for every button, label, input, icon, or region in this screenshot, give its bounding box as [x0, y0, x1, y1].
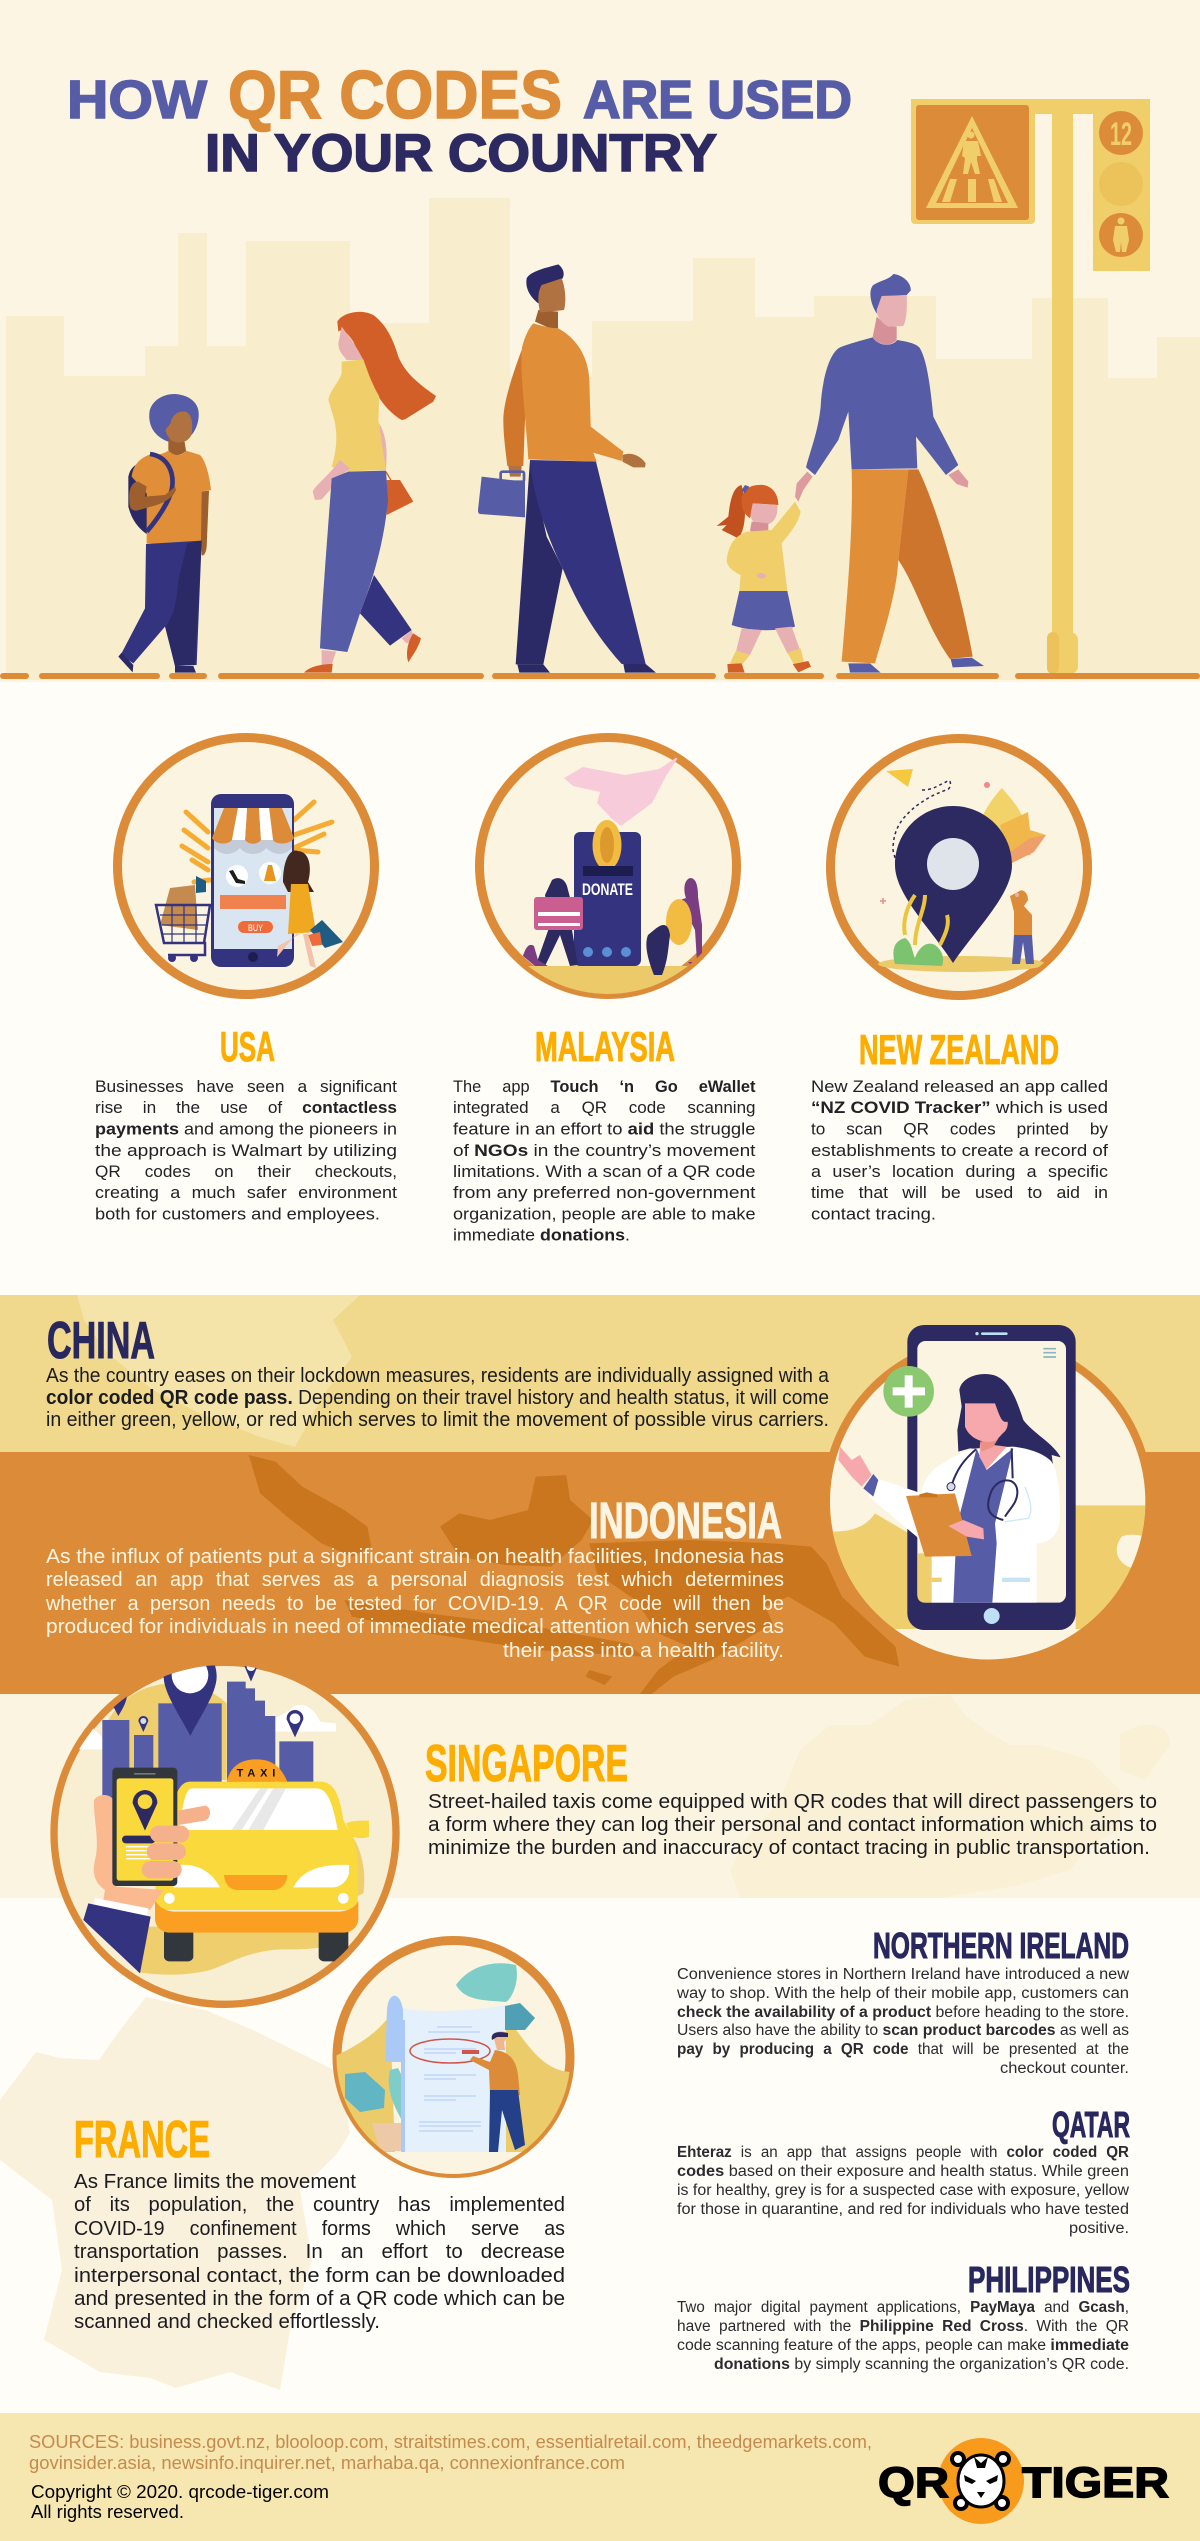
road dashes: [0, 673, 1200, 679]
hand holding phone: [83, 1768, 210, 1973]
panel: Singapore band: [0, 1694, 1200, 1898]
text: France body: and presented in the form of a QR code which can be: [74, 2288, 565, 2310]
text: Indonesia body: produced for individuals in need of immediate medical attention which serves as: [46, 1616, 784, 1638]
traffic sign post: 12: [1110, 116, 1132, 152]
Indonesia map silhouette: [249, 1455, 899, 1695]
China map silhouette: [77, 1295, 360, 1447]
person: man with briefcase: [478, 264, 656, 673]
text: New Zealand body: a user’s location during a specific: [811, 1162, 1109, 1181]
text: Qatar body: codes based on their exposure and health status. While green: [677, 2163, 1129, 2180]
panel: Indonesia text: [45, 1492, 784, 1662]
panel: Indonesia band: [0, 1452, 1200, 1695]
text: Indonesia body: whether a person needs to be tested for COVID-19. A QR code will then be: [45, 1593, 784, 1615]
paper form: [385, 1996, 506, 2152]
text: Malaysia body: organization, people are able to make: [453, 1204, 756, 1224]
text: Malaysia body: from any preferred non-government: [453, 1183, 756, 1202]
father: [795, 274, 984, 673]
text: USA body: [95, 1077, 397, 1224]
text: Indonesia body: their pass into a health facility.: [503, 1640, 784, 1662]
text: Malaysia body: The app Touch ‘n Go eWallet: [453, 1077, 756, 1096]
heading: New Zealand: NEW ZEALAND: [859, 1026, 1059, 1073]
person: boy and woman: [118, 312, 436, 673]
text: copyright: All rights reserved.: [31, 2501, 184, 2522]
text: France body: [74, 2171, 565, 2333]
panel: China text: [46, 1312, 830, 1431]
text: Northern Ireland body: Convenience stores in Northern Ireland have introduced a new: [677, 1966, 1130, 1983]
text: Malaysia body: of NGOs in the country’s movement: [453, 1141, 756, 1160]
text: USA body: payments and among the pioneers in: [95, 1120, 397, 1138]
text: France body: As France limits the movement: [74, 2171, 356, 2193]
text: China body: in either green, yellow, or red which serves to limit the movement of possible virus carriers.: [46, 1409, 829, 1431]
logo: QR Tiger: QR: [878, 2459, 949, 2507]
text: France body: scanned and checked effortlessly.: [74, 2311, 380, 2333]
text: Northern Ireland body: way to shop. With the help of their mobile app, customers can: [676, 1985, 1129, 2002]
text: Northern Ireland body: check the availability of a product before heading to the store.: [677, 2004, 1129, 2021]
heading: USA: USA: [220, 1023, 275, 1070]
text: Malaysia body: limitations. With a scan of a QR code: [453, 1162, 756, 1181]
text: Philippines body: donations by simply scanning the organization’s QR code.: [714, 2356, 1129, 2373]
taxi car: [155, 1759, 369, 1961]
title: ARE USED: [583, 70, 852, 130]
text: New Zealand body: time that will be used to aid in: [811, 1183, 1108, 1202]
icon: online store phone circle: BUY: [248, 923, 263, 933]
panel: France text: [74, 2111, 565, 2333]
heading: Philippines: PHILIPPINES: [968, 2259, 1130, 2300]
text: USA body: the approach is Walmart by utilizing: [95, 1141, 397, 1160]
panel: China band: [0, 1295, 1200, 1452]
text: Singapore body: Street-hailed taxis come equipped with QR codes that will direct passengers to: [428, 1791, 1157, 1813]
heading: Indonesia: INDONESIA: [589, 1492, 782, 1549]
text: Qatar body: Ehteraz is an app that assigns people with color coded QR: [677, 2144, 1129, 2161]
text: Northern Ireland body: [676, 1966, 1130, 2077]
text: Indonesia body: [45, 1546, 784, 1662]
text: France body: interpersonal contact, the form can be downloaded: [74, 2265, 565, 2287]
panel: France map: [0, 1997, 350, 2390]
text: Philippines body: [677, 2299, 1129, 2373]
text: New Zealand body: contact tracing.: [811, 1204, 936, 1224]
panel: New Zealand: [811, 738, 1109, 1224]
traffic sign post: [911, 99, 1150, 675]
icon: doctor on phone circle: [826, 1325, 1149, 1663]
Singapore map silhouette: [730, 1694, 1170, 1898]
text: Singapore body: a form where they can log their personal and contact information which aims to: [428, 1814, 1157, 1836]
text: USA body: QR codes on their checkouts,: [95, 1162, 397, 1181]
text: Northern Ireland body: Users also have the ability to scan product barcodes as well as: [677, 2022, 1129, 2039]
text: Qatar body: is for healthy, grey is for a suspected case with exposure, yellow: [677, 2182, 1130, 2199]
heading: China: CHINA: [47, 1312, 155, 1370]
logo: QR Tiger: TIGER: [1022, 2459, 1169, 2507]
panel: Malaysia: [453, 738, 756, 1244]
text: copyright: [31, 2481, 329, 2522]
text: sources: [29, 2431, 872, 2473]
heading: Malaysia: MALAYSIA: [535, 1023, 675, 1070]
text: New Zealand body: “NZ COVID Tracker” which is used: [811, 1098, 1108, 1117]
girl: [717, 485, 811, 673]
text: sources: govinsider.asia, newsinfo.inquirer.net, marhaba.qa, connexionfrance.com: [29, 2452, 625, 2473]
panel: Northern Ireland: [676, 1925, 1130, 2077]
text: USA body: Businesses have seen a significant: [95, 1077, 397, 1096]
text: copyright: Copyright © 2020. qrcode-tiger.com: [31, 2481, 329, 2502]
icon: donate phone circle: DONATE: [582, 880, 633, 899]
text: New Zealand body: [811, 1077, 1109, 1224]
icon: form circle: [330, 1940, 580, 2180]
panel: Qatar: [677, 2104, 1130, 2237]
icon: location pin circle: [830, 738, 1088, 996]
title: IN YOUR COUNTRY: [205, 124, 717, 183]
text: USA body: creating a much safer environment: [95, 1183, 397, 1202]
man: [470, 2031, 525, 2152]
text: Malaysia body: [453, 1077, 756, 1244]
icon: donate phone circle: [470, 738, 750, 1006]
text: USA body: both for customers and employees.: [95, 1204, 380, 1224]
icon: taxi circle: [54, 1647, 396, 2004]
text: Singapore body: minimize the burden and inaccuracy of contact tracing in public transportation.: [428, 1837, 1150, 1859]
logo: QR Tiger: [878, 2438, 1169, 2524]
text: Philippines body: have partnered with the Philippine Red Cross. With the QR: [677, 2318, 1129, 2335]
title: HOW: [67, 70, 207, 130]
text: China body: [46, 1365, 830, 1431]
text: France body: COVID-19 confinement forms which serve as: [74, 2218, 565, 2240]
panel: hero header: [0, 0, 1200, 682]
text: France body: of its population, the country has implemented: [74, 2194, 565, 2216]
text: Qatar body: [677, 2144, 1130, 2237]
text: New Zealand body: establishments to create a record of: [811, 1141, 1108, 1160]
person: father and girl: [717, 274, 984, 673]
icon: online store phone circle: [118, 738, 374, 994]
text: New Zealand body: to scan QR codes printed by: [811, 1120, 1108, 1138]
text: France body: transportation passes. In an effort to decrease: [74, 2241, 565, 2263]
heading: France: FRANCE: [74, 2111, 210, 2169]
text: USA body: rise in the use of contactless: [95, 1098, 397, 1117]
text: Qatar body: positive.: [1069, 2220, 1129, 2237]
text: Philippines body: Two major digital payment applications, PayMaya and Gcash,: [677, 2299, 1129, 2316]
text: Indonesia body: released an app that serves as a personal diagnosis test which determines: [46, 1569, 784, 1591]
text: Malaysia body: feature in an effort to aid the struggle: [453, 1120, 756, 1138]
text: Qatar body: for those in quarantine, and red for individuals who have tested: [677, 2201, 1129, 2218]
text: Northern Ireland body: checkout counter.: [1000, 2060, 1129, 2077]
heading: Singapore: SINGAPORE: [425, 1735, 628, 1793]
text: Philippines body: code scanning feature of the apps, people can make immediate: [677, 2337, 1129, 2354]
text: Malaysia body: integrated a QR code scanning: [453, 1098, 756, 1117]
text: New Zealand body: New Zealand released an app called: [811, 1077, 1108, 1096]
title: QR CODES: [228, 57, 562, 133]
panel: footer: [0, 2413, 1200, 2541]
text: Malaysia body: immediate donations.: [453, 1226, 630, 1244]
icon: green plus: [883, 1366, 934, 1417]
text: Northern Ireland body: pay by producing a QR code that will be presented at the: [677, 2041, 1129, 2058]
text: Indonesia body: As the influx of patients put a significant strain on health facilities, Indonesia has: [46, 1546, 784, 1568]
heading: Qatar: QATAR: [1052, 2104, 1130, 2145]
text: China body: As the country eases on their lockdown measures, residents are individually assigned with a: [46, 1365, 830, 1387]
city skyline: [6, 198, 1200, 680]
panel: Philippines: [677, 2259, 1130, 2373]
title: [67, 57, 852, 183]
woman: [304, 312, 436, 673]
text: China body: color coded QR code pass. Depending on their travel history and health status, it will come: [46, 1387, 829, 1409]
text: Singapore body: [428, 1791, 1157, 1859]
text: sources: SOURCES: business.govt.nz, blooloop.com, straitstimes.com, essentialretail.com, theedgemarkets.com,: [29, 2431, 872, 2452]
boy: [118, 394, 211, 673]
panel: USA: [95, 738, 397, 1224]
taxi car: TAXI: [237, 1768, 275, 1780]
